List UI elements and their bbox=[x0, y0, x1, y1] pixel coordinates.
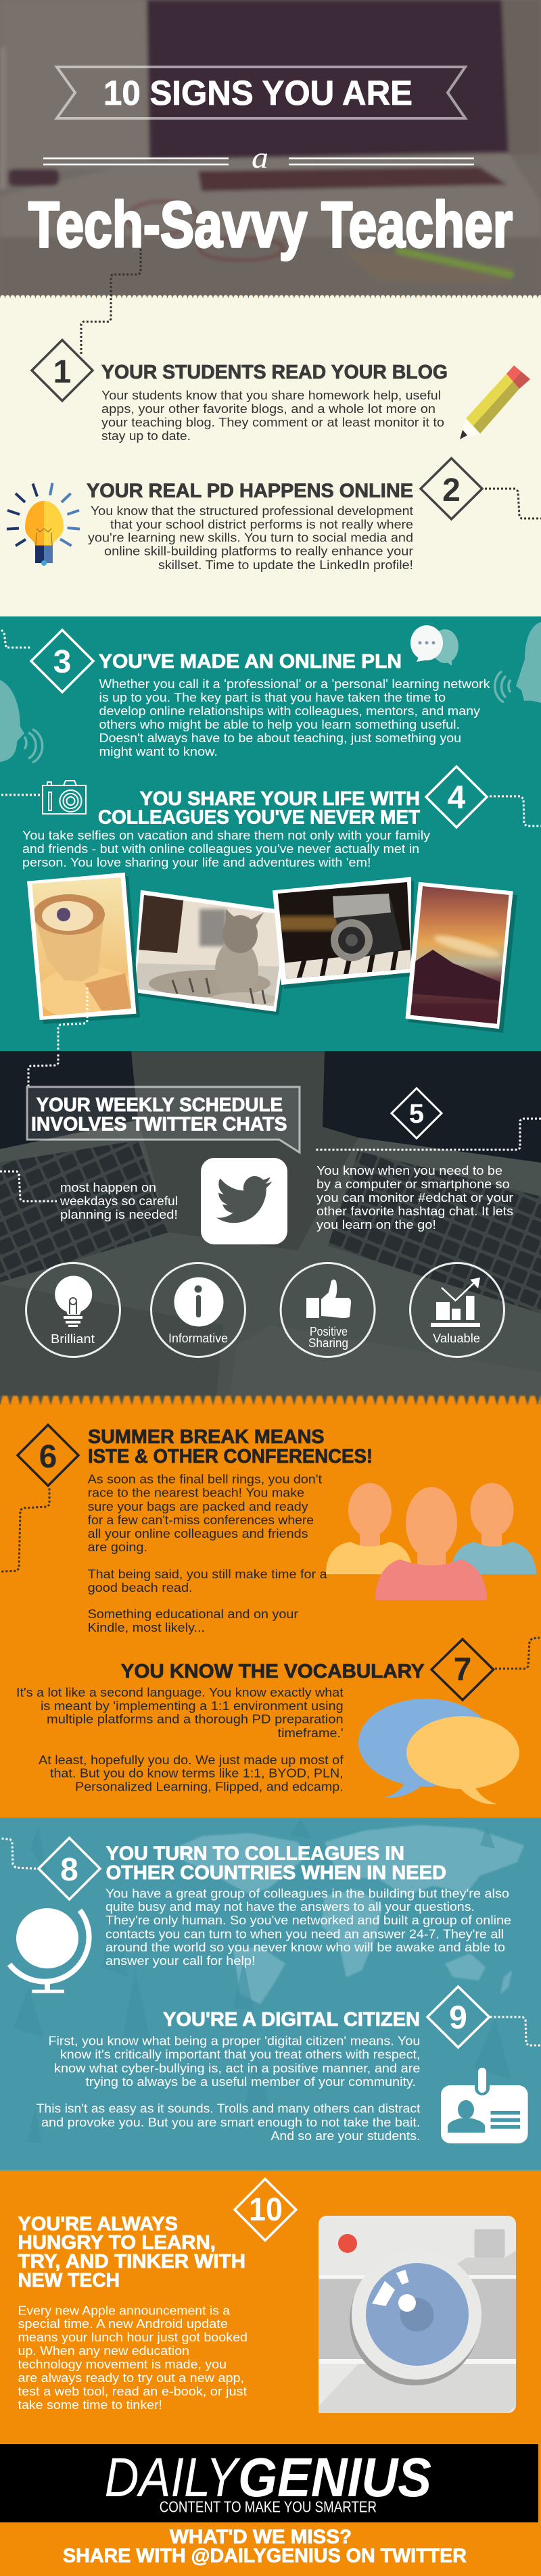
left note: weekdays so careful bbox=[60, 1194, 178, 1208]
sign 9 body bbox=[37, 2034, 420, 2143]
dotted path from sign 4 bbox=[490, 796, 541, 826]
right note: You know when you need to be bbox=[316, 1163, 502, 1177]
sign 2 diamond bbox=[421, 458, 482, 519]
orange panel: signs 6 and 7 bbox=[0, 1396, 541, 1818]
sign 9 body: know what cyber-bullying is, act in a positive manner, and are bbox=[54, 2061, 420, 2075]
footer call to action bbox=[0, 2523, 541, 2576]
sign 6 body bbox=[88, 1472, 327, 1634]
right note: other favorite hashtag chat. It lets bbox=[316, 1204, 513, 1218]
sign 7 diamond: 7 bbox=[454, 1652, 471, 1688]
icon: light bulb bbox=[7, 483, 80, 566]
cream panel: signs 1 and 2 bbox=[0, 249, 541, 616]
sign 6 heading: SUMMER BREAK MEANS bbox=[88, 1426, 325, 1448]
photo: coffee bbox=[27, 872, 140, 1024]
dotted path from sign 9 bbox=[490, 2017, 541, 2045]
dotted path from sign 6 bbox=[1, 1488, 49, 1572]
left note bbox=[60, 1180, 178, 1221]
sign 3 diamond: 3 bbox=[53, 644, 71, 680]
sign 8 diamond: 8 bbox=[60, 1852, 78, 1888]
sign 7 body: Personalized Learning, Flipped, and edcamp. bbox=[75, 1780, 344, 1794]
sign 10 body: are always ready to try out a new app, bbox=[18, 2371, 244, 2385]
sign 3 body: others who might be able to help you learn something useful. bbox=[99, 717, 460, 731]
sign 6 body: for a few can't-miss conferences where bbox=[88, 1513, 314, 1527]
sign 10 body: take some time to tinker! bbox=[18, 2398, 162, 2412]
sign 8 body: They're only human. So you've networked and built a group of online bbox=[105, 1913, 511, 1927]
sign 6 body: are going. bbox=[88, 1540, 147, 1554]
sign 1 heading: YOUR STUDENTS READ YOUR BLOG bbox=[101, 362, 448, 383]
blue panel: signs 8 and 9 bbox=[0, 1818, 541, 2170]
left note: most happen on bbox=[60, 1180, 156, 1194]
dotted path to sign 1 bbox=[81, 249, 141, 354]
sign 1 body: your teaching blog. They comment or at least monitor it to bbox=[101, 415, 444, 429]
sign 6 heading bbox=[88, 1426, 373, 1467]
sign 10 heading: NEW TECH bbox=[18, 2270, 120, 2291]
right note: by a computer or smartphone so bbox=[316, 1177, 510, 1191]
dotted path from sign 2 bbox=[485, 489, 541, 518]
sign 2 body: skillset. Time to update the LinkedIn profile! bbox=[158, 558, 413, 572]
sign 7 body bbox=[16, 1685, 344, 1794]
dotted path from sign 7 bbox=[495, 1638, 540, 1669]
sign 6 body: all your online colleagues and friends bbox=[88, 1526, 308, 1540]
sign 3 body: might want to know. bbox=[99, 744, 218, 758]
sign 4 heading bbox=[98, 788, 420, 829]
sign 1 diamond: 1 bbox=[53, 354, 71, 390]
icon: pencil bbox=[460, 365, 530, 439]
sign 4 heading: COLLEAGUES YOU'VE NEVER MET bbox=[98, 807, 420, 829]
sign 8 heading: YOU TURN TO COLLEAGUES IN bbox=[106, 1843, 404, 1864]
sign 3 diamond bbox=[31, 630, 93, 692]
sign 3 body bbox=[99, 677, 490, 758]
sign 7 diamond bbox=[431, 1639, 494, 1700]
banner text: 10 SIGNS YOU ARE bbox=[103, 74, 413, 112]
faint triangles background bbox=[14, 1818, 511, 2143]
sign 8 body: You have a great group of colleagues in the building but they're also bbox=[105, 1886, 509, 1901]
dark panel: sign 5 bbox=[0, 1051, 541, 1406]
sign 2 body: that your school district performs is not really where bbox=[110, 517, 413, 531]
sign 2 diamond: 2 bbox=[442, 472, 461, 508]
dotted path into heading box bbox=[28, 1054, 58, 1086]
icon: three people bbox=[326, 1483, 536, 1600]
logo wordmark: DAILY bbox=[105, 2447, 241, 2508]
dotted path to sign 3 bbox=[1, 630, 31, 648]
sign 2 body: You know that the structured professional development bbox=[91, 504, 413, 518]
icon: speaking head right bbox=[495, 622, 541, 703]
sign 1 body: Your students know that you share homework help, useful bbox=[101, 388, 441, 402]
sign 7 heading: YOU KNOW THE VOCABULARY bbox=[121, 1661, 425, 1682]
circle: Positive Sharing bbox=[281, 1263, 375, 1357]
icon: ID badge bbox=[441, 2068, 528, 2143]
right note bbox=[316, 1163, 513, 1232]
icon: speech bubbles bbox=[358, 1699, 519, 1804]
sign 8 body: answer your call for help! bbox=[105, 1953, 256, 1968]
sign 10 diamond: 10 bbox=[249, 2192, 283, 2228]
sign 4 diamond: 4 bbox=[448, 780, 466, 816]
icon: speaking head left bbox=[0, 680, 43, 762]
sign 10 heading: TRY, AND TINKER WITH bbox=[18, 2251, 245, 2273]
logo band: GENIUS bbox=[238, 2447, 431, 2508]
circle: Positive Sharing: Positive bbox=[310, 1325, 348, 1338]
icon: large camera bbox=[319, 2216, 516, 2413]
sign 9 heading: YOU'RE A DIGITAL CITIZEN bbox=[163, 2009, 420, 2031]
heading speech box: INVOLVES TWITTER CHATS bbox=[31, 1114, 287, 1136]
sign 10 heading: HUNGRY TO LEARN, bbox=[18, 2232, 216, 2254]
sign 10 heading bbox=[18, 2214, 245, 2291]
heading speech box: YOUR WEEKLY SCHEDULE bbox=[37, 1094, 283, 1116]
sign 10 body: Every new Apple announcement is a bbox=[18, 2304, 231, 2317]
sign 4 body bbox=[22, 828, 431, 869]
circle: Brilliant: Brilliant bbox=[51, 1332, 95, 1346]
sign 8 body bbox=[105, 1886, 511, 1968]
sign 1 body: stay up to date. bbox=[101, 429, 191, 443]
dotted path from sign 5 bbox=[316, 1119, 541, 1150]
world map background bbox=[172, 1825, 524, 2004]
sign 4 body: You take selfies on vacation and share them not only with your family bbox=[22, 828, 431, 842]
sign 10 body: test a web tool, read an e-book, or just bbox=[18, 2384, 247, 2398]
sign 8 body: contacts you can turn to when you need an answer 24-7. They're all bbox=[105, 1926, 504, 1941]
orange panel: sign 10 bbox=[0, 2170, 541, 2444]
photo: vintage camera bbox=[270, 877, 416, 989]
circle: Positive Sharing: Sharing bbox=[308, 1336, 348, 1350]
sign 2 heading: YOUR REAL PD HAPPENS ONLINE bbox=[87, 480, 413, 502]
sign 1 body bbox=[101, 388, 444, 443]
sign 6 diamond bbox=[18, 1425, 78, 1486]
sign 8 heading: OTHER COUNTRIES WHEN IN NEED bbox=[106, 1862, 446, 1884]
sign 10 body: means your lunch hour just got booked bbox=[18, 2330, 248, 2344]
sign 6 diamond: 6 bbox=[39, 1439, 57, 1475]
sign 6 heading: ISTE & OTHER CONFERENCES! bbox=[88, 1446, 373, 1467]
sign 9 diamond: 9 bbox=[449, 2000, 467, 2036]
sign 9 diamond bbox=[427, 1987, 490, 2047]
sign 8 body: around the world so you never know who will be awake and able to bbox=[105, 1940, 505, 1954]
right note: you can monitor #edchat or your bbox=[316, 1190, 513, 1205]
sign 3 body: is up to you. The key part is that you have taken the time to bbox=[99, 690, 446, 704]
sign 6 body: good beach read. bbox=[88, 1580, 193, 1595]
sign 8 heading bbox=[106, 1843, 446, 1884]
icon: camera outline bbox=[43, 781, 86, 814]
sign 7 body: that. But you do know terms like 1:1, BYOD, PLN, bbox=[50, 1766, 344, 1780]
sign 9 body: And so are your students. bbox=[270, 2129, 420, 2143]
sign 4 body: and friends - but with online colleagues you've never actually met in bbox=[22, 842, 419, 856]
sign 9 body: know it's critically important that you treat others with respect, bbox=[60, 2047, 420, 2062]
sign 9 body: trying to always be a useful member of your community. bbox=[85, 2074, 416, 2089]
ribbon banner bbox=[57, 67, 465, 118]
sign 10 heading: YOU'RE ALWAYS bbox=[18, 2214, 178, 2235]
sign 6 body: That being said, you still make time for a bbox=[88, 1567, 327, 1581]
logo band bbox=[0, 2444, 538, 2523]
sign 3 body: develop online relationships with colleagues, mentors, and many bbox=[99, 704, 481, 718]
sign 7 body: multiple platforms and a thorough PD preparation bbox=[47, 1712, 344, 1726]
sign 5 diamond: 5 bbox=[409, 1099, 424, 1129]
divider with a: a bbox=[252, 141, 268, 174]
sign 6 body: Kindle, most likely... bbox=[88, 1620, 205, 1634]
sign 3 body: Doesn't always have to be about teaching, just something you bbox=[99, 731, 461, 745]
sign 2 body: you're learning new skills. You turn to social media and bbox=[88, 531, 413, 545]
hero photo background bbox=[0, 0, 541, 297]
sign 6 body: As soon as the final bell rings, you don't bbox=[88, 1472, 322, 1486]
sign 7 body: It's a lot like a second language. You know exactly what bbox=[16, 1685, 344, 1699]
icon: globe bbox=[9, 1908, 89, 1993]
sign 6 body: sure your bags are packed and ready bbox=[88, 1499, 308, 1513]
dotted path to camera icon bbox=[1, 794, 40, 796]
circle: Valuable: Valuable bbox=[433, 1332, 480, 1345]
icon: chat bubbles bbox=[410, 625, 458, 666]
sign 6 body: Something educational and on your bbox=[88, 1607, 298, 1621]
circle: Brilliant bbox=[26, 1263, 120, 1357]
dotted path to sign 8 bbox=[1, 1839, 39, 1869]
sign 1 body: apps, your other favorite blogs, and a whole lot more on bbox=[101, 402, 436, 416]
dotted path to sign 5 heading bbox=[58, 988, 87, 1051]
sign 10 body: special time. A new Android update bbox=[18, 2316, 228, 2331]
sign 4 diamond bbox=[426, 767, 487, 827]
right note: you learn on the go! bbox=[316, 1217, 436, 1232]
circle: Valuable bbox=[410, 1263, 504, 1357]
sign 9 body: First, you know what being a proper 'digital citizen' means. You bbox=[48, 2034, 420, 2048]
laptops photo background bbox=[0, 1051, 541, 1396]
sign 9 body: and provoke you. But you are smart enough to not take the bait. bbox=[41, 2115, 420, 2129]
sign 5 diamond bbox=[392, 1088, 442, 1138]
hero panel bbox=[0, 0, 541, 297]
sign 7 body: At least, hopefully you do. We just made up most of bbox=[39, 1753, 344, 1767]
heading speech box bbox=[27, 1087, 300, 1152]
sign 3 heading: YOU'VE MADE AN ONLINE PLN bbox=[99, 651, 402, 673]
sign 4 heading: YOU SHARE YOUR LIFE WITH bbox=[140, 788, 420, 810]
sign 6 body: race to the nearest beach! You make bbox=[88, 1486, 304, 1500]
sign 3 body: Whether you call it a 'professional' or a 'personal' learning network bbox=[99, 677, 490, 691]
sign 8 body: quite busy and may not have the answers to all your questions. bbox=[105, 1899, 475, 1914]
circle: Informative bbox=[151, 1263, 245, 1357]
photo: cat bbox=[135, 890, 283, 1015]
sign 10 body bbox=[18, 2304, 248, 2412]
sign 10 body: technology movement is made, you bbox=[18, 2357, 227, 2371]
logo tagline: CONTENT TO MAKE YOU SMARTER bbox=[160, 2498, 377, 2516]
sign 4 body: person. You love sharing your life and adventures with 'em! bbox=[22, 855, 371, 869]
photo: sunset bbox=[406, 882, 517, 1033]
sign 10 body: up. When any new education bbox=[18, 2343, 189, 2358]
sign 2 body bbox=[88, 504, 413, 572]
teal panel: signs 3 and 4 bbox=[0, 616, 541, 1051]
footer call to action: SHARE WITH @DAILYGENIUS ON TWITTER bbox=[63, 2546, 467, 2567]
icon: twitter tile bbox=[201, 1158, 287, 1244]
sign 9 body: This isn't as easy as it sounds. Trolls and many others can distract bbox=[37, 2101, 420, 2116]
footer call to action: WHAT'D WE MISS? bbox=[170, 2526, 352, 2548]
sign 2 body: online skill-building platforms to really enhance your bbox=[104, 543, 413, 558]
sign 7 body: timeframe.' bbox=[278, 1726, 344, 1740]
sign 8 diamond bbox=[39, 1838, 100, 1899]
sign 10 diamond bbox=[235, 2179, 296, 2240]
left note: planning is needed! bbox=[60, 1207, 178, 1221]
sign 1 diamond bbox=[32, 340, 93, 401]
sign 7 body: is meant by 'implementing a 1:1 environment using bbox=[41, 1699, 344, 1713]
circle: Informative: Informative bbox=[168, 1332, 228, 1345]
